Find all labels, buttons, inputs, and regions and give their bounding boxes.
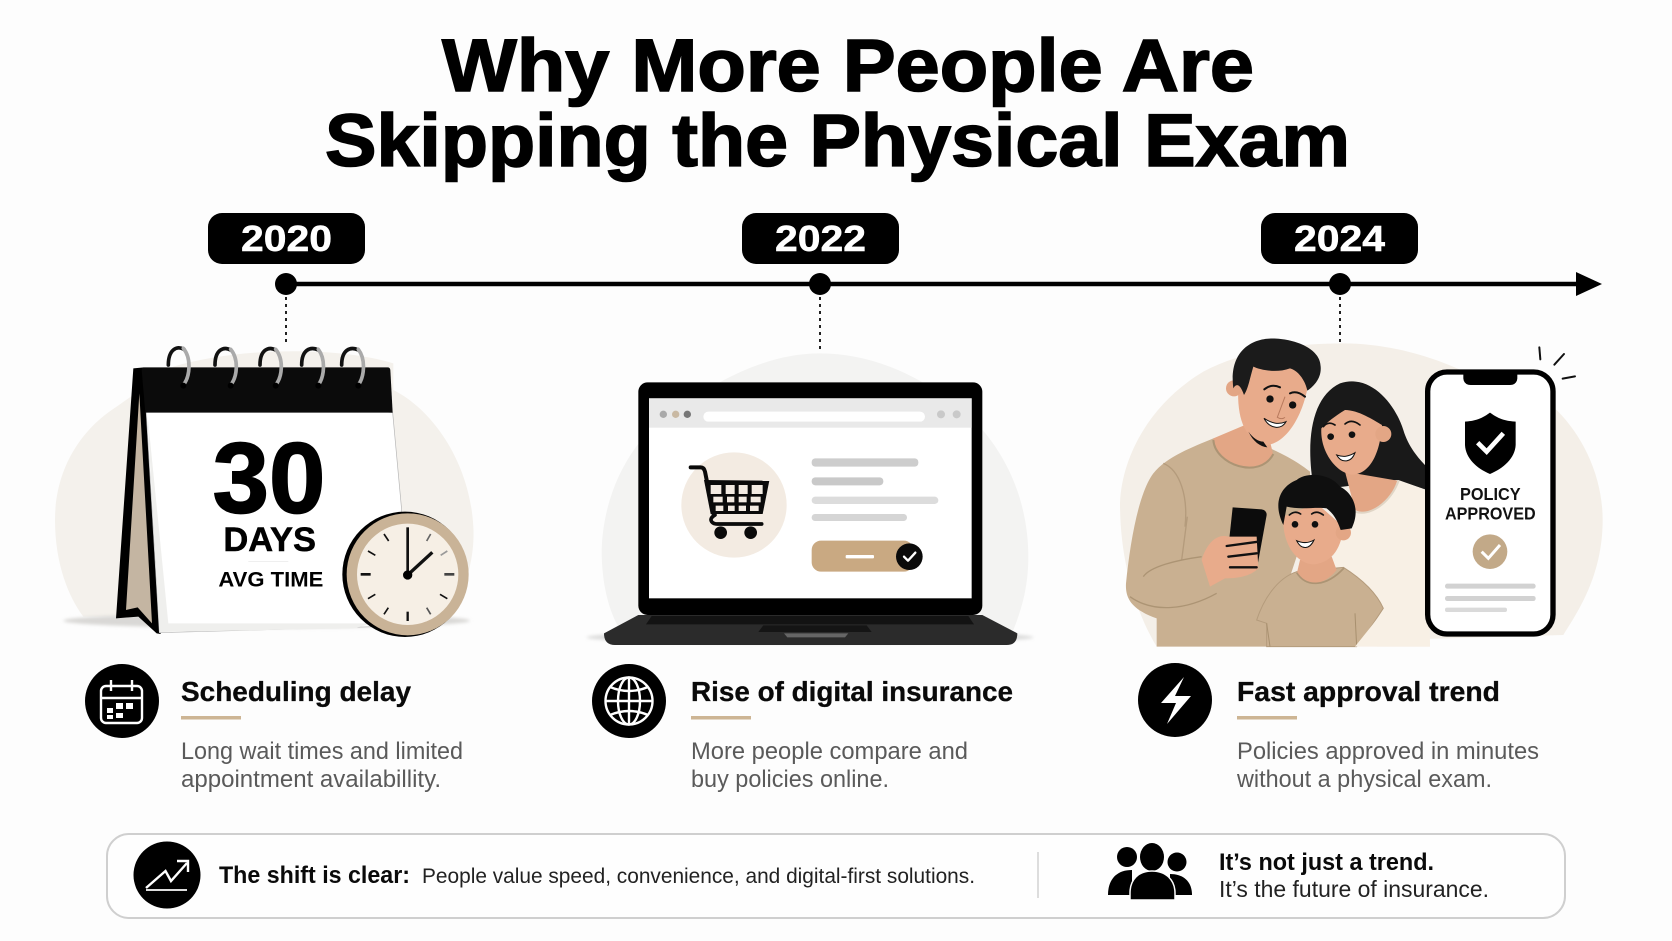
phone label: APPROVED (1445, 503, 1536, 523)
shield icon (1465, 413, 1516, 474)
callout text: the shift is clear (219, 862, 975, 889)
man (1126, 338, 1321, 647)
title (325, 24, 1350, 182)
year 2024 marker: 2024 (1294, 218, 1385, 259)
callout bar (107, 834, 1565, 918)
callout text: the shift is clear: People value speed, convenience, and digital-first solutions. (422, 864, 975, 888)
title: Skipping the Physical Exam (325, 99, 1350, 182)
woman (1310, 381, 1430, 647)
title: Why More People Are (442, 24, 1254, 107)
illustration: laptop shopping (587, 353, 1033, 645)
item: rise of digital insurance (592, 664, 1013, 793)
phone label (1445, 484, 1536, 523)
year 2020 marker: 2020 (241, 218, 332, 259)
timeline (208, 213, 1602, 352)
item: fast approval trend: Fast approval trend (1237, 676, 1500, 707)
item: fast approval trend (1138, 663, 1539, 793)
callout text: future of insurance (1219, 849, 1489, 902)
callout text: future of insurance: It’s not just a trend. (1219, 849, 1434, 876)
icon: trend arrow (134, 842, 200, 908)
year 2020 marker (208, 213, 365, 346)
item: scheduling delay: appointment availabillity. (181, 766, 441, 793)
item: scheduling delay: Long wait times and limited (181, 738, 463, 765)
callout text: the shift is clear: The shift is clear: (219, 862, 410, 889)
year 2024 marker (1261, 213, 1418, 343)
calendar text (213, 423, 325, 592)
item: fast approval trend: Policies approved in minutes (1237, 738, 1539, 765)
clock (342, 512, 469, 637)
item: rise of digital insurance: More people compare and (691, 738, 968, 765)
calendar text: AVG TIME (218, 568, 323, 592)
icon: people (1108, 843, 1192, 900)
confirm button (812, 541, 923, 572)
icon: shopping cart (681, 452, 787, 558)
year 2022 marker (742, 213, 899, 352)
binder rings (168, 348, 363, 389)
illustration: calendar and clock (55, 348, 474, 637)
item: rise of digital insurance: buy policies online. (691, 766, 889, 793)
woman's arm around boy (1355, 530, 1430, 647)
item: scheduling delay (85, 664, 463, 793)
icon: lightning bolt (1138, 663, 1212, 737)
man's hand holding phone (1130, 507, 1267, 608)
item: rise of digital insurance: Rise of digital insurance (691, 676, 1013, 707)
icon: calendar (85, 664, 159, 738)
approved phone (1428, 347, 1575, 634)
arrow head (1576, 272, 1602, 296)
form lines (812, 458, 938, 521)
illustration: family and approved policy phone (1120, 338, 1603, 647)
phone label: POLICY (1460, 484, 1521, 504)
calendar text: 30 (213, 423, 325, 535)
calendar text: DAYS (223, 521, 316, 559)
item: scheduling delay: Scheduling delay (181, 676, 412, 707)
item: fast approval trend: without a physical exam. (1236, 766, 1492, 793)
boy (1257, 475, 1383, 647)
icon: globe (592, 664, 666, 738)
year 2022 marker: 2022 (775, 218, 866, 259)
callout text: future of insurance: It’s the future of insurance. (1219, 876, 1489, 902)
